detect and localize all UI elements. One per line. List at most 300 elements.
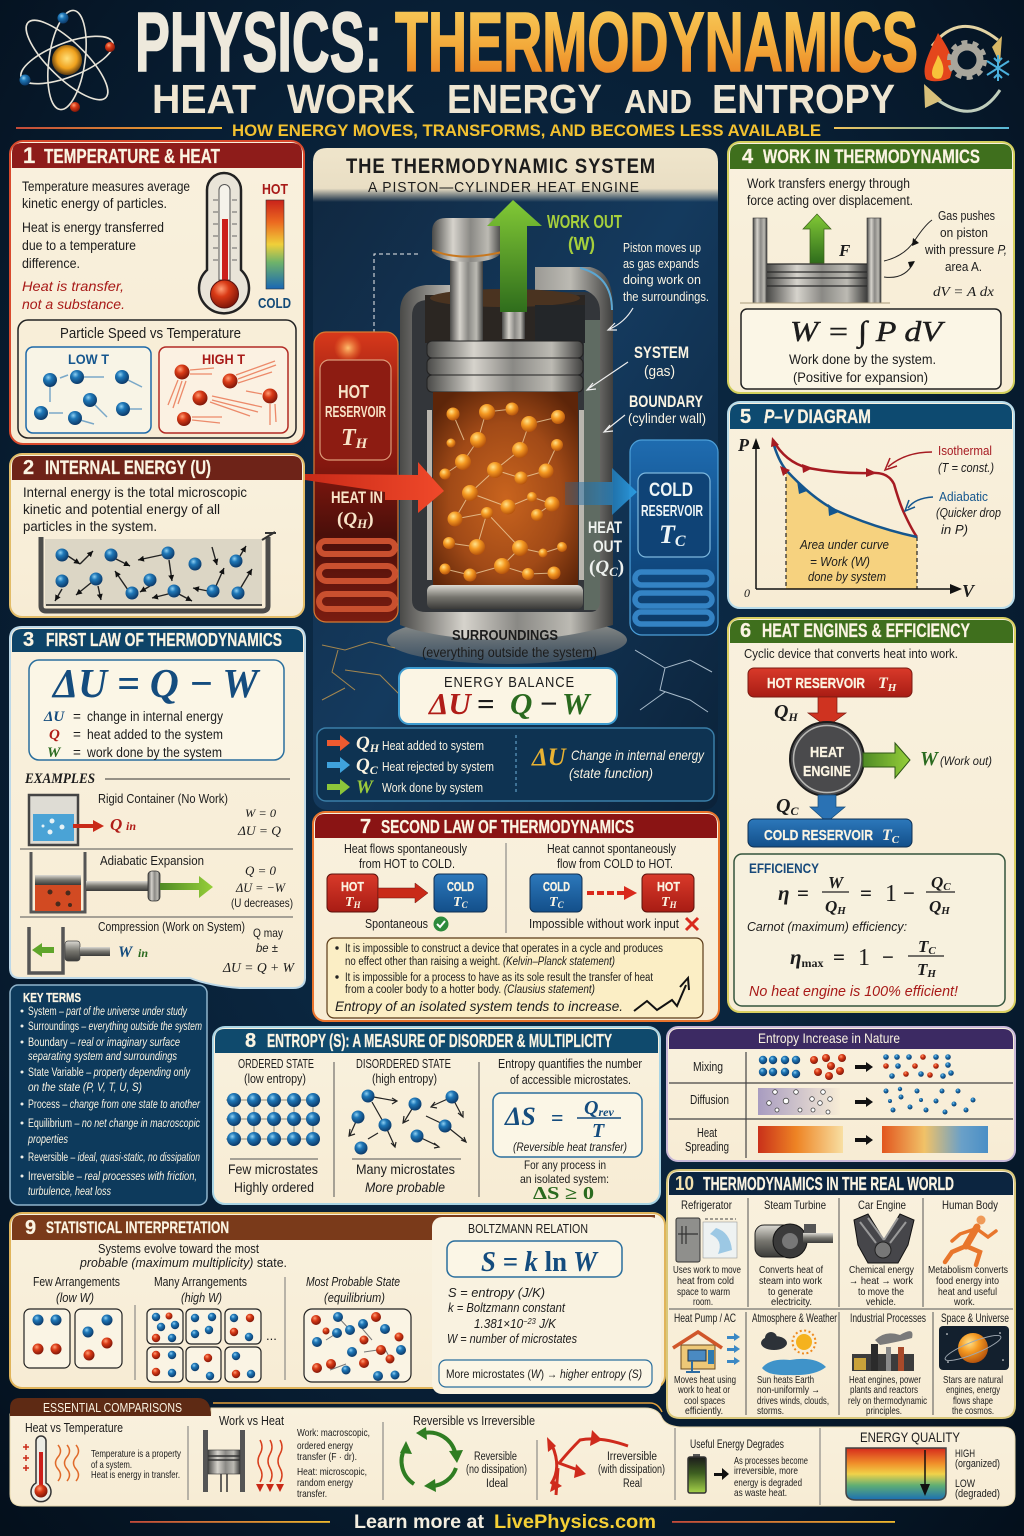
many arrangements [135,1275,285,1382]
panel 9: statistical interpretation [10,1213,665,1394]
chart: P-V curves: 0 [744,586,750,600]
header 2 [12,456,302,480]
few arrangements: (low W) [56,1291,94,1305]
title [135,0,918,89]
item: refrigerator [673,1198,741,1308]
text: work definition: Work transfers energy through [747,176,910,191]
example: adiabatic expansion: Q = 0 [245,863,276,878]
subtitle: AND [624,83,692,120]
formula box: delta U: ΔU [43,709,65,725]
statements box: Entropy of an isolated system tends to increase. [335,998,623,1014]
reversible vs irreversible [400,1414,665,1495]
example: adiabatic expansion: ΔU = −W [235,880,286,895]
statements box: It is impossible for a process to have as its sole result the transfer of heat [345,972,654,984]
example: compression: W [118,944,134,961]
example: adiabatic expansion: Adiabatic Expansion [100,853,204,868]
annotation: surroundings: (everything outside the system) [422,644,597,660]
cold reservoir box: COLD RESERVOIR [764,827,873,844]
header 5: 5 [740,406,751,428]
entropy formula block: ΔS ≥ 0 [533,1183,594,1203]
header 9: STATISTICAL INTERPRETATION [46,1218,229,1237]
reversible vs irreversible: (with dissipation) [598,1464,665,1476]
text: temperature definition: kinetic energy of particles. [22,195,167,211]
item: heat pump: Heat Pump / AC [674,1311,736,1325]
text: internal energy definition: kinetic and potential energy of all [23,501,220,517]
annotation: piston moves [608,240,709,330]
piston rod and head [432,218,502,342]
item: car engine: → heat → work [849,1275,914,1287]
carnot formula [790,937,944,980]
label: adiabatic: Adiabatic [939,489,988,504]
legend: C [370,763,379,777]
energy quality: LOW [955,1478,975,1490]
examples heading: EXAMPLES [24,771,95,787]
footer: LivePhysics.com [494,1512,656,1533]
carnot formula: η [790,945,802,969]
example: rigid container: Rigid Container (No Work) [98,791,228,806]
annotation: gas pushes: on piston [940,226,988,240]
right: impossible heat flow: COLD [543,880,570,894]
efficiency formula: H [940,905,950,917]
item: human body: work. [953,1296,975,1308]
entropy formula block: T [592,1120,605,1142]
header 8: 8 [245,1030,256,1052]
energy balance box: = [477,686,495,721]
entropy formula block: Entropy quantifies the number [498,1056,643,1071]
key terms bullets: Reversible – ideal, quasi-static, no dissipation [28,1152,200,1164]
item: steam turbine [755,1198,833,1308]
panel 10: real world [667,1170,1015,1418]
key terms bullets: State Variable – property depending only [28,1067,191,1079]
annotation: piston moves: doing work on [623,272,701,287]
heat scale [258,181,291,312]
efficiency formula: 1 [885,881,897,907]
item: car engine: to move the [858,1286,904,1298]
legend: Work done by system [382,780,483,795]
carnot formula: − [882,945,894,969]
chart: P-V curves [737,435,976,601]
item: steam turbine: to generate [768,1286,813,1298]
arrow: Q hot: Q [774,701,788,723]
panel: thermodynamic system center [305,148,718,810]
left: spontaneous heat flow: Heat flows spontaneously [344,841,467,856]
disordered state: (high entropy) [372,1072,437,1086]
work vs heat: random energy [297,1477,354,1489]
useful energy degrades [688,1437,808,1499]
formula box: delta U: = [73,709,81,724]
footer: Learn more at [354,1512,485,1533]
entropy formula block: ΔS [504,1102,536,1131]
example: rigid container [20,791,293,849]
hot reservoir: T [341,425,356,451]
disordered state: DISORDERED STATE [356,1057,451,1071]
cold reservoir: C [675,533,686,550]
icon: heat engine cycle [924,26,1009,111]
annotation: surroundings [422,627,597,660]
header 6: 6 [740,620,751,642]
reversible vs irreversible: Reversible [474,1451,517,1463]
formula box: work integral: (Positive for expansion) [793,369,928,385]
arrow: heat out: HEAT [588,518,622,537]
arrow: work out: W [920,748,939,770]
carnot formula: 1 [858,945,870,971]
panel 4: work [728,142,1014,393]
right: impossible heat flow: flow from COLD to HOT. [557,856,673,871]
cold coils [635,572,712,624]
item: heat pump: Moves heat using [674,1374,736,1386]
efficiency formula: = [860,881,872,905]
key terms bullets: System – part of the universe under study [28,1006,188,1018]
subtitle: ENTROPY [712,76,895,122]
header 7 [315,814,717,838]
key terms bullets: Process – change from one state to another [28,1099,201,1111]
left: spontaneous heat flow: HOT [341,880,364,894]
work vs heat: Heat: microscopic, [297,1466,367,1478]
heat scale: COLD [258,295,291,312]
entropy formula block: For any process in [524,1158,606,1172]
entropy formula block: = [551,1105,564,1130]
annotation: system: (gas) [644,363,675,380]
boltzmann relation [432,1217,661,1394]
annotation: surroundings: SURROUNDINGS [452,627,558,644]
arrow: heat out: OUT [593,537,622,556]
icon: atom [15,8,119,112]
panel: essential comparisons [10,1398,1015,1506]
annotation: piston moves: as gas expands [623,256,699,271]
chart: P-V curves: V [962,581,976,601]
text: internal energy definition [23,484,247,534]
cold reservoir box: T [882,827,892,844]
item: refrigerator: space to warm [677,1286,730,1298]
boltzmann relation: k = Boltzmann constant [448,1301,565,1315]
carnot formula: T [918,937,928,956]
formula box: delta U: W [47,745,62,761]
item: human body: Human Body [942,1198,998,1212]
container of particles [41,532,276,611]
item: refrigerator: room. [693,1296,713,1308]
efficiency formula: η [778,881,790,905]
row: diffusion: Diffusion [690,1092,729,1107]
key terms bullets: Boundary – real or imaginary surface [28,1037,180,1049]
footer [130,1512,895,1533]
text: temperature definition: Temperature measures average [22,178,190,194]
reversible vs irreversible: Reversible vs Irreversible [413,1414,535,1428]
cold reservoir [630,440,718,635]
tagline: HOW ENERGY MOVES, TRANSFORMS, AND BECOMES LESS AVAILABLE [232,121,821,140]
example: compression: ΔU = Q + W [222,961,295,976]
heat vs temperature [23,1421,182,1502]
arrow: work out: (Work out) [940,754,992,768]
annotation: gas pushes: area A. [945,260,982,274]
header 5: P–V DIAGRAM [764,407,871,428]
legend: Change in internal energy [571,747,705,763]
row: diffusion [690,1087,976,1115]
many arrangements: Many Arrangements [154,1275,247,1289]
annotation: gas pushes: Gas pushes [938,209,995,223]
item: steam turbine: steam into work [759,1275,823,1287]
entropy formula block: of accessible microstates. [510,1072,631,1087]
chart: P-V curves: Area under curve [799,538,889,552]
boltzmann relation: S = entropy (J/K) [448,1286,545,1300]
disordered state: Many microstates [356,1161,455,1177]
hot reservoir: H [355,436,369,452]
item: atmosphere: non-uniformly → [757,1384,820,1396]
few arrangements: Few Arrangements [33,1275,120,1289]
intro text: Systems evolve toward the most [98,1241,259,1256]
boltzmann relation: S = k ln W [481,1247,599,1278]
example: adiabatic expansion [20,852,293,917]
piston diagram [740,214,932,303]
carnot formula: max [802,956,824,970]
item: industrial: plants and reactors [850,1384,918,1396]
arrow: Q hot [774,697,846,727]
energy balance box: ENERGY BALANCE [444,675,575,691]
legend: W [356,777,374,798]
boltzmann relation: BOLTZMANN RELATION [468,1221,588,1236]
right: impossible heat flow: C [558,900,565,910]
arrow: Q hot: H [787,710,798,724]
icon: thermometer [199,173,249,313]
label: adiabatic [905,489,1001,537]
few arrangements [24,1275,122,1368]
energy quality [846,1429,1000,1500]
annotation: piston moves: the surroundings. [623,289,709,304]
header 3 [12,629,303,652]
header 7: 7 [360,816,371,838]
piston diagram: F [838,241,851,260]
ordered state: ORDERED STATE [238,1057,314,1071]
heat engine circle: ENGINE [803,763,851,780]
statements box [327,938,703,1018]
cold reservoir box: C [892,834,900,846]
right: impossible heat flow [529,841,698,931]
energy quality: HIGH [955,1448,975,1460]
efficiency box: EFFICIENCY [749,861,819,876]
boltzmann relation: W = number of microstates [447,1332,577,1346]
arrow: heat in [305,462,444,531]
panel 6: heat engines [728,618,1015,1012]
carnot formula: C [928,945,936,957]
item: industrial: rely on thermodynamic [848,1395,927,1407]
hot reservoir [314,332,398,622]
gas chamber [427,392,584,585]
work vs heat: transfer. [297,1488,327,1500]
cylinder [400,218,613,640]
example: compression: in [138,946,148,960]
left: spontaneous heat flow: T [345,895,354,910]
intro text: probable (maximum multiplicity) state. [79,1255,287,1270]
heat vs temperature: Heat vs Temperature [25,1421,123,1435]
subtitle: WORK [287,76,415,122]
energy balance box: − [540,686,558,721]
high T particles: HIGH T [202,351,245,367]
useful energy degrades: Useful Energy Degrades [690,1437,784,1451]
annotation: gas pushes [924,209,1007,300]
item: space: engines, energy [946,1384,1001,1396]
label: isothermal: Isothermal [938,443,992,458]
disordered state [349,1057,466,1195]
header 2: INTERNAL ENERGY (U) [45,458,211,479]
item: industrial [848,1311,927,1417]
formula box: work integral [741,309,1001,389]
statements box: no effect other than raising a weight. (Kelvin–Planck statement) [345,956,615,968]
right: impossible heat flow: T [661,895,670,910]
efficiency formula: W [828,873,845,892]
formula box: delta U: heat added to the system [87,727,223,742]
example: compression: be ± [256,941,278,955]
heat engine circle: HEAT [810,744,844,761]
header nature: Entropy Increase in Nature [758,1030,900,1046]
arrow: heat out: ) [618,557,624,578]
icon: irreversible arrows [551,1439,628,1495]
heat engine circle [790,722,864,796]
item: atmosphere: storms. [757,1405,784,1417]
center title: THE THERMODYNAMIC SYSTEM [346,155,656,178]
statements box: It is impossible to construct a device that operates in a cycle and produces [345,943,663,955]
row: mixing [693,1054,954,1080]
key terms bullets: Surroundings – everything outside the system [28,1021,202,1033]
hot reservoir box: HOT RESERVOIR [767,675,865,692]
efficiency box [734,854,1005,1006]
hot reservoir box [748,668,912,697]
formula box: delta U: work done by the system [86,745,222,760]
entropy formula block: an isolated system: [520,1172,609,1186]
carnot formula: = [833,945,845,969]
icon: rising entropy line [634,978,689,1011]
item: atmosphere [752,1311,837,1417]
item: heat pump: cool spaces [684,1395,725,1407]
right: impossible heat flow: H [669,900,678,910]
efficiency box: Carnot (maximum) efficiency: [747,919,907,934]
efficiency formula: C [943,881,951,893]
entropy formula block: (Reversible heat transfer) [513,1140,627,1154]
work vs heat: ordered energy [297,1440,354,1452]
item: refrigerator: heat from cold [677,1275,734,1287]
header nature [669,1029,1013,1049]
right: impossible heat flow: Heat cannot spontaneously [547,841,676,856]
disordered state: More probable [365,1179,445,1195]
many arrangements: ... [266,1328,277,1343]
text: temperature definition: due to a temperature [22,237,136,253]
panel: entropy increase in nature [667,1027,1015,1161]
key terms bullets: on the state (P, V, T, U, S) [28,1082,142,1094]
panel 7: second law [313,812,719,1021]
arrow: Q cold: C [790,804,799,818]
particle speed box [18,320,296,438]
efficiency formula: H [836,905,846,917]
entropy formula block: Q [584,1097,598,1119]
energy quality: ENERGY QUALITY [860,1429,961,1445]
heat vs temperature: of a system. [91,1459,132,1471]
row: mixing: Mixing [693,1059,723,1074]
center title: A PISTON—CYLINDER HEAT ENGINE [368,179,640,196]
item: space: the cosmos. [952,1405,994,1417]
row: heat spreading: Spreading [685,1139,729,1154]
header 4: 4 [742,146,754,168]
key terms bullets: properties [27,1134,68,1146]
panel 2: internal energy [10,454,304,617]
dashed link [374,254,418,358]
item: space: Stars are natural [943,1374,1003,1386]
energy quality: (organized) [955,1458,1000,1470]
arrow: work out [863,743,992,778]
left: spontaneous heat flow: Spontaneous [365,916,428,931]
item: space [939,1311,1009,1417]
arrow: heat out: C [609,564,618,579]
annotation: piston moves: Piston moves up [623,240,701,255]
item: human body [928,1198,1008,1308]
heat vs temperature: Temperature is a property [91,1448,182,1460]
legend: H [369,741,380,755]
key terms bullets [20,1006,202,1198]
legend: (state function) [569,765,653,781]
useful energy degrades: as waste heat. [734,1487,787,1499]
chart: P-V curves: P [737,435,750,455]
example: rigid container: W = 0 [245,806,276,820]
header 1 [12,143,302,168]
reversible vs irreversible: Ideal [486,1478,508,1490]
most probable state: Most Probable State [306,1275,400,1289]
left: spontaneous heat flow: T [453,895,462,910]
formula box: delta U [29,660,284,761]
hot reservoir box: T [878,675,888,692]
item: heat pump [673,1311,740,1417]
item: heat pump: work to heat or [677,1384,730,1396]
boltzmann relation: 1.381×10 [474,1317,526,1331]
left: spontaneous heat flow: from HOT to COLD. [359,856,455,871]
annotation: gas pushes: with pressure P, [924,243,1007,257]
efficiency formula: Q [929,897,941,916]
label: adiabatic: (Quicker drop [936,506,1001,520]
useful energy degrades: energy is degraded [734,1477,802,1489]
efficiency formula: − [903,881,915,905]
formula box: delta U: ΔU = Q − W [51,660,260,706]
item: industrial: principles. [866,1405,902,1417]
legend [317,728,714,801]
left: spontaneous heat flow [327,841,487,932]
key terms bullets: Equilibrium – no net change in macroscopic [28,1118,200,1130]
work vs heat [203,1414,370,1500]
reversible vs irreversible: Real [623,1478,642,1490]
item: atmosphere: Sun heats Earth [757,1374,814,1386]
header 8: ENTROPY (S): A MEASURE OF DISORDER & MULTIPLICITY [267,1031,612,1051]
label: adiabatic: in P) [941,523,968,537]
panel 5: P-V diagram [728,402,1014,608]
text: temperature definition [22,178,190,312]
statements box: from a cooler body to a hotter body. (Clausius statement) [345,984,595,996]
header 1: TEMPERATURE & HEAT [44,146,220,168]
header 2: 2 [23,457,34,479]
item: car engine: vehicle. [866,1296,896,1308]
row: heat spreading [685,1125,988,1154]
header 9 [12,1215,655,1240]
label: isothermal [885,443,994,475]
formula box: delta U: Q [49,727,60,743]
item: car engine: Car Engine [858,1198,906,1212]
efficiency formula [778,873,955,917]
particle speed box: Particle Speed vs Temperature [60,325,241,342]
intro text [79,1241,287,1270]
carnot formula: H [926,968,936,980]
panel 3: first law [10,627,305,988]
icon: battery [688,1454,706,1493]
efficiency box: No heat engine is 100% efficient! [749,984,958,1000]
annotation: boundary: BOUNDARY [629,392,704,411]
subtitle: HEAT [152,76,256,122]
example: compression [29,920,295,976]
row: heat spreading: Heat [697,1125,717,1140]
entropy formula block [493,1056,643,1203]
